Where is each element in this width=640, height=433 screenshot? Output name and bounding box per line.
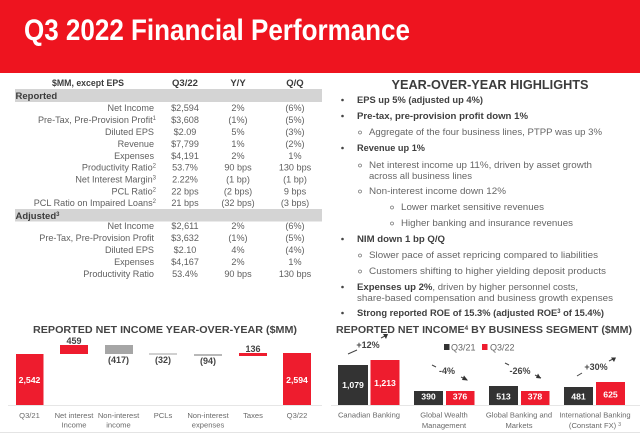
highlights list: Revenue up 1% [357,143,425,154]
highlights list [341,95,613,319]
highlights list: Pre-tax, pre-provision profit down 1% [357,111,528,122]
segment chart title: BY BUSINESS SEGMENT ($MM) [468,324,632,336]
section: reported: 2% [231,103,245,113]
section: reported: Pre-Tax, Pre-Provision Profit [38,115,153,125]
bars: International Banking [564,382,625,405]
section: reported: (6%) [285,103,305,113]
waterfall axis labels: expenses [192,420,224,430]
segment axis labels: Global Banking and [486,410,552,420]
waterfall chart title: REPORTED NET INCOME YEAR-OVER-YEAR ($MM) [33,324,297,336]
section: reported: 9 bps [284,186,307,196]
bars: International Banking: 625 [603,390,618,400]
section: reported: (3 bps) [281,198,309,208]
panel: net income by business segment chart [331,324,640,430]
highlights list: Lower market sensitive revenues [401,202,544,213]
section: adjusted: 4% [231,245,245,255]
segment chart title: REPORTED NET INCOME [336,324,463,336]
highlights list: Higher banking and insurance revenues [401,218,573,229]
waterfall axis labels [19,411,307,430]
bars: Canadian Banking: 1,213 [374,378,396,388]
section: reported: (3%) [285,127,305,137]
bar: Q3/22 [283,353,311,405]
section: reported: (32 bps) [221,198,255,208]
bars: Canadian Banking: 1,079 [342,380,364,390]
section: reported: 90 bps [224,162,252,172]
section: adjusted: Expenses [114,257,154,267]
segment axis labels: Canadian Banking [338,410,400,420]
highlights list: Slower pace of asset repricing compared to liabilities [369,250,598,261]
table column header [52,78,304,89]
section: adjusted: Productivity Ratio [83,269,154,279]
highlights list: Non-interest income down 12% [369,186,506,197]
bars: Global Wealth Management: 390 [421,392,436,402]
section: reported: $3,608 [171,115,199,125]
waterfall axis labels: Income [62,420,86,430]
highlights list: NIM down 1 bp Q/Q [357,234,446,245]
section: reported: Net Income [108,103,154,113]
bar: net interest income [60,336,88,354]
growth arrow: Global Wealth Management -4% [432,365,468,380]
section: adjusted: Net Income [108,221,154,231]
section: reported: 22 bps [171,186,199,196]
waterfall axis labels: Q3/22 [287,411,307,420]
title banner [0,0,640,73]
bar: Q3/21: 2,542 [19,375,41,385]
legend: Q3/21 [451,342,476,352]
bar: non-interest expenses: (94) [200,356,216,366]
table column header: $MM, except EPS [52,78,124,89]
highlights list: across all business lines [369,171,472,182]
section: reported [15,89,322,208]
growth arrow: Canadian Banking +12%: +12% [356,340,380,350]
highlights list: share-based compensation and business growth expenses [357,293,613,304]
growth arrow: International Banking +30%: +30% [584,362,608,372]
section: reported: PCL Ratio on Impaired Loans [34,198,153,208]
section: reported: Diluted EPS [105,127,154,137]
bar: non-interest income: (417) [108,355,129,365]
waterfall axis labels: PCLs [154,411,172,420]
section: adjusted: $4,167 [171,257,199,267]
bar: non-interest income [105,345,133,365]
waterfall axis labels: Non-interest [98,411,140,420]
bar: non-interest expenses [194,354,222,366]
section: reported: Expenses [114,151,154,161]
section: reported: Productivity Ratio [82,162,153,172]
section: adjusted: 2% [231,257,245,267]
bar: taxes [239,344,267,356]
section: reported: 21 bps [171,198,199,208]
growth arrow: Global Wealth Management -4%: -4% [439,366,455,376]
bar: taxes: 136 [245,344,261,354]
section: adjusted: $2.10 [174,245,196,255]
title: Q3 2022 Financial Performance [24,14,410,47]
growth arrow: International Banking +30% [577,358,616,376]
legend: Q3/22 [490,342,515,352]
section: reported: 53.7% [172,162,198,172]
legend [444,342,515,352]
section: reported: PCL Ratio [112,186,153,196]
bars: Global Wealth Management: 376 [453,392,467,402]
highlights list: Expenses up 2%, driven by higher personnel costs, [357,282,578,293]
panel: year-over-year highlights [341,77,613,319]
highlights list: Aggregate of the four business lines, PTPP was up 3% [369,127,602,138]
section: adjusted: Pre-Tax, Pre-Provision Profit [39,233,154,243]
highlights list: Net interest income up 11%, driven by asset growth [369,160,592,171]
section: reported: Revenue [118,139,154,149]
waterfall axis labels: Q3/21 [19,411,40,420]
growth arrow: Global Banking and Markets -26%: -26% [509,366,531,376]
section: reported: (2 bps) [224,186,252,196]
section: reported: 130 bps [279,162,312,172]
bars: International Banking: 481 [571,392,586,402]
section: reported: Net Interest Margin [75,174,153,184]
bars: Global Banking and Markets: 378 [528,392,542,402]
highlights list: of 15.4%) [561,308,604,319]
section: adjusted: 2% [231,221,245,231]
growth arrow: Canadian Banking +12% [348,334,388,354]
highlights list: Customers shifting to higher yielding deposit products [369,266,606,277]
section: reported: 2.22% [172,174,198,184]
segment axis labels: (Constant FX) [569,421,616,430]
highlights heading: YEAR-OVER-YEAR HIGHLIGHTS [392,77,589,92]
waterfall axis labels: Taxes [243,411,263,420]
highlights list: Strong reported ROE of 15.3% (adjusted ROE [357,308,563,319]
section: reported: 5% [231,127,245,137]
section: reported: 2 [153,199,157,205]
segment axis labels: Markets [505,421,533,430]
growth arrow: Global Banking and Markets -26% [505,363,541,378]
bar: Q3/21 [16,354,44,405]
section: adjusted: 130 bps [279,269,312,279]
bars: Canadian Banking [338,360,400,405]
section: adjusted: Diluted EPS [105,245,154,255]
section: reported: $4,191 [171,151,199,161]
section: reported: 2 [153,164,157,170]
section: reported: 3 [153,176,157,182]
section: adjusted: Adjusted [16,211,56,222]
bar: PCLs: (32) [155,355,171,365]
section: adjusted: 1% [288,257,302,267]
section: reported: (1%) [228,115,248,125]
bars: Global Banking and Markets: 513 [496,392,511,402]
segment axis labels: Management [422,421,467,430]
panel: financial results table [15,78,322,279]
section: reported: $2,594 [171,103,199,113]
section: reported: (1 bp) [226,174,250,184]
bars: Global Banking and Markets [489,386,550,405]
table column header: Q/Q [286,78,304,89]
segment axis labels: Global Wealth [420,410,468,420]
section: adjusted: $2,611 [171,221,199,231]
segment chart title: 4 [465,325,469,332]
section: adjusted: $3,632 [171,233,199,243]
section: adjusted: (5%) [285,233,305,243]
section: adjusted [15,209,322,279]
segment axis labels [338,410,631,430]
section: reported: (2%) [285,139,305,149]
section: reported: 1 [153,116,157,122]
bar: PCLs [149,353,177,365]
section: adjusted: 90 bps [224,269,252,279]
section: reported: 1% [231,139,245,149]
waterfall axis labels: income [106,420,131,430]
section: reported: $2.09 [174,127,196,137]
highlights list: 3 [557,309,561,315]
section: adjusted: 3 [56,212,60,218]
bar: Q3/22: 2,594 [286,375,308,385]
highlights list: EPS up 5% (adjusted up 4%) [357,95,483,106]
waterfall axis labels: Net interest [55,411,94,420]
segment axis labels: 3 [618,422,621,428]
table column header: Q3/22 [172,78,198,89]
section: reported: $7,799 [171,139,199,149]
section: adjusted: (6%) [285,221,305,231]
section: reported: 2 [153,188,157,194]
segment axis labels: International Banking [559,410,631,420]
panel: reported net income waterfall chart [8,324,322,430]
table column header: Y/Y [230,78,246,89]
waterfall axis labels: Non-interest [187,411,230,420]
section: reported: 2% [231,151,245,161]
section: reported: 1% [288,151,302,161]
section: adjusted: (1%) [228,233,248,243]
section: adjusted: 53.4% [172,269,198,279]
section: reported: (5%) [285,115,305,125]
bar: net interest income: 459 [66,336,82,346]
section: adjusted: (4%) [285,245,305,255]
section: reported: (1 bp) [283,174,307,184]
bars: Global Wealth Management [414,391,474,405]
section: reported: Reported [16,91,57,102]
